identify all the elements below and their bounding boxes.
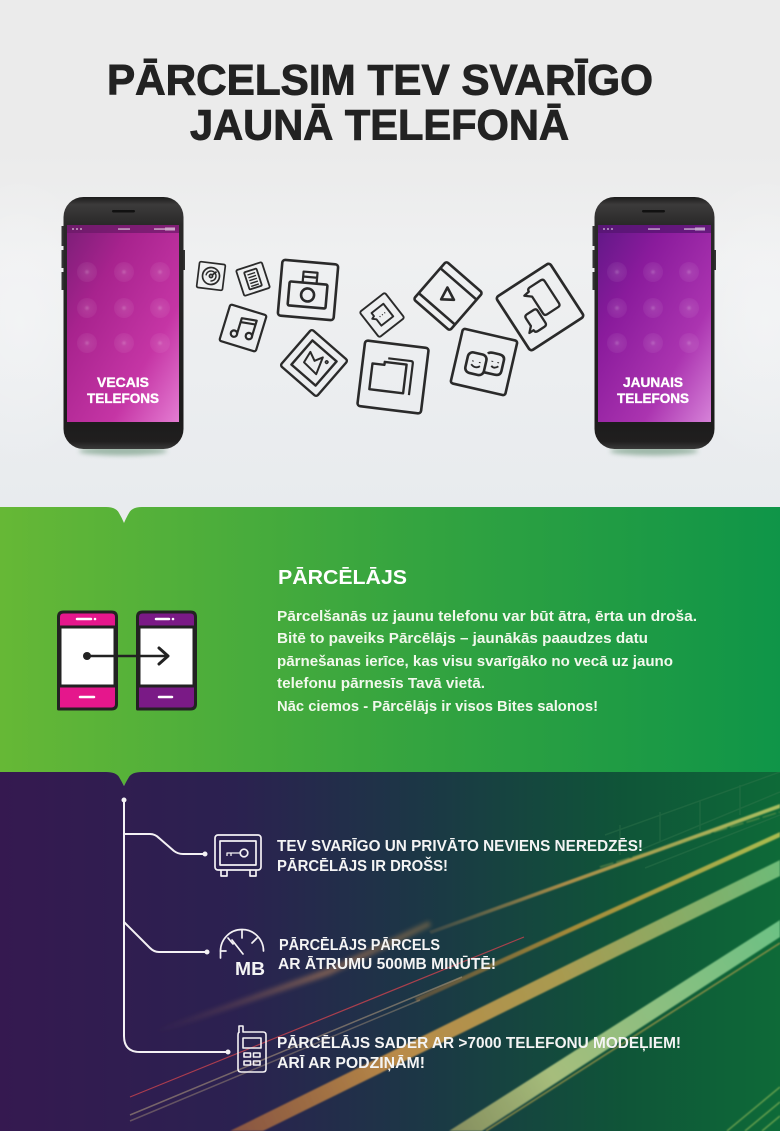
- icon: chat bubbles: [496, 263, 584, 351]
- icon: speed gauge MB: MB: [235, 959, 265, 979]
- icon: speed gauge MB: [220, 930, 265, 979]
- phone: new phone: JAUNAIS: [623, 374, 683, 390]
- text: speed benefit: AR ĀTRUMU 500MB MINŪTĒ!: [278, 954, 496, 973]
- text block: Pārcēlājs description: telefonu pārnesīs Tavā vietā.: [277, 676, 485, 692]
- text block: Pārcēlājs description: Bitē to paveiks Pārcēlājs – jaunākās paaudzes datu: [277, 631, 648, 647]
- icon: message bubble: [360, 293, 404, 337]
- phone: old phone: TELEFONS: [87, 390, 159, 406]
- icon: picture: [280, 329, 348, 397]
- connector lines: [122, 798, 230, 1054]
- title: PĀRCELSIM TEV SVARĪGO: [107, 56, 653, 104]
- panel: light header background: [0, 0, 780, 510]
- icon: music: [219, 304, 267, 352]
- text block: Pārcēlājs description: pārnešanas ierīce, kas visu svarīgāko no vecā uz jauno: [277, 654, 673, 670]
- light streak: red line: [130, 937, 524, 1097]
- text: compatibility benefit: ARĪ AR PODZIŅĀM!: [277, 1053, 425, 1072]
- text block: Pārcēlājs description: Nāc ciemos - Pārcēlājs ir visos Bites salonos!: [277, 699, 598, 715]
- title: JAUNĀ TELEFONĀ: [190, 102, 569, 150]
- text: safety benefit: PĀRCĒLĀJS IR DROŠS!: [277, 856, 448, 875]
- panel: green Pārcēlājs band: [0, 507, 780, 786]
- phone: old phone: [62, 197, 185, 456]
- icon: folder: [357, 340, 429, 414]
- panel: dark speed-lines background: [0, 772, 780, 1131]
- heading: Pārcēlājs: PĀRCĒLĀJS: [278, 566, 407, 589]
- light streaks: main bands: [230, 804, 780, 1131]
- icon: transfer between phones: [58, 612, 196, 709]
- text: compatibility benefit: PĀRCĒLĀJS SADER AR >7000 TELEFONU MODEĻIEM!: [277, 1033, 681, 1052]
- text block: Pārcēlājs description: [277, 609, 697, 715]
- icon: push-button phone: [238, 1026, 266, 1072]
- phone: new phone: TELEFONS: [617, 390, 689, 406]
- phone: old phone: VECAIS: [97, 374, 149, 390]
- text: compatibility benefit: [277, 1033, 681, 1072]
- icon: camera: [278, 260, 338, 320]
- text: speed benefit: [278, 935, 496, 973]
- icon: safe: [215, 835, 261, 876]
- title: [107, 56, 653, 150]
- icon: document: [236, 262, 270, 296]
- text: safety benefit: TEV SVARĪGO UN PRIVĀTO NEVIENS NEREDZĒS!: [277, 836, 643, 855]
- background: faint railing structure: [605, 772, 780, 868]
- phone: new phone: [592, 197, 716, 456]
- text block: Pārcēlājs description: Pārcelšanās uz jaunu telefonu var būt ātra, ērta un droša.: [277, 609, 697, 625]
- text: safety benefit: [277, 836, 643, 875]
- light streak: brown glow: [187, 920, 432, 1022]
- text: speed benefit: PĀRCĒLĀJS PĀRCELS: [279, 935, 440, 954]
- icon: video: [413, 261, 483, 331]
- light streak: pale lines: [130, 977, 462, 1121]
- icon: smileys: [450, 328, 518, 396]
- icon: dial: [197, 262, 225, 290]
